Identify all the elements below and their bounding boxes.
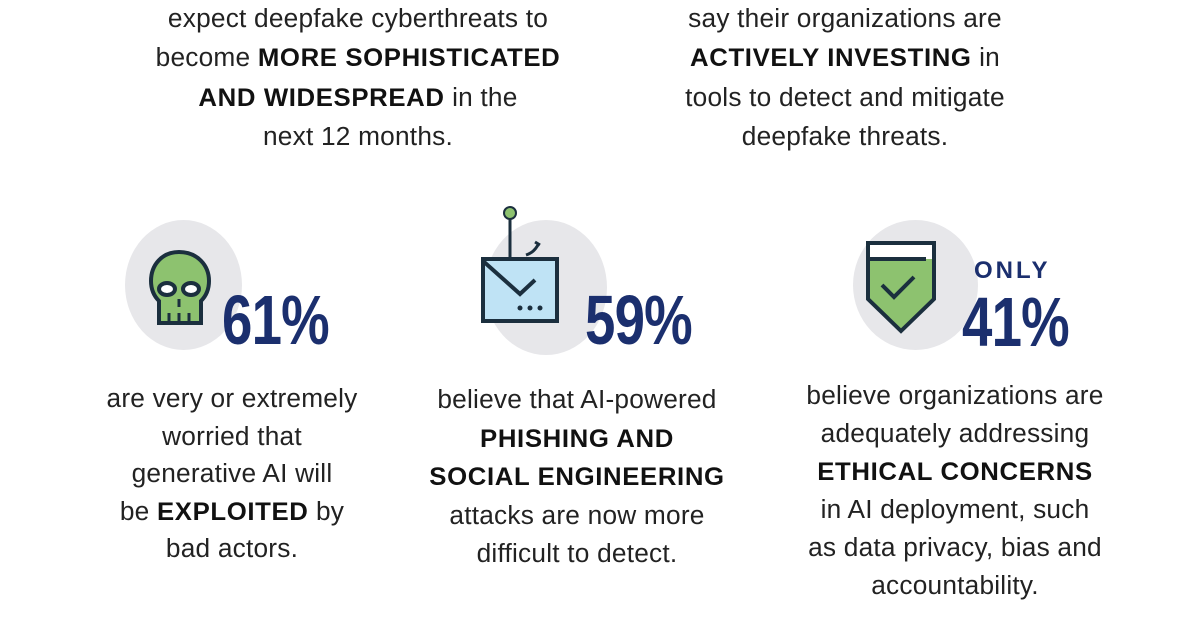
text block: top left stat: become MORE SOPHISTICATED: [156, 44, 560, 72]
icon background circle: [485, 220, 607, 355]
text block: top left stat: [156, 5, 560, 151]
text block: 59% description: attacks are now more: [449, 502, 705, 530]
text block: 41% description: [806, 382, 1104, 600]
text block: 41% description: adequately addressing: [821, 420, 1089, 448]
text block: 61% description: [107, 385, 358, 563]
text block: 41% description: believe organizations are: [806, 382, 1104, 410]
text block: top left stat: AND WIDESPREAD in the: [198, 84, 518, 112]
text block: top right stat: deepfake threats.: [742, 123, 948, 151]
text block: 61% description: be EXPLOITED by: [120, 498, 344, 526]
text block: 61% description: bad actors.: [166, 535, 298, 563]
text block: 59% description: believe that AI-powered: [437, 386, 717, 414]
label: ONLY: ONLY: [974, 257, 1050, 284]
text block: 41% description: ETHICAL CONCERNS: [817, 458, 1093, 486]
text block: top right stat: ACTIVELY INVESTING in: [690, 44, 1000, 72]
text block: 61% description: worried that: [162, 422, 302, 450]
text block: 41% description: in AI deployment, such: [821, 496, 1089, 524]
number: 61%: 61%: [222, 281, 329, 359]
text block: top right stat: say their organizations are: [688, 5, 1002, 33]
text block: 61% description: are very or extremely: [107, 385, 357, 413]
icon background circle: [125, 220, 242, 350]
text block: 59% description: PHISHING AND: [480, 424, 674, 452]
text block: top left stat: expect deepfake cyberthreats to: [168, 5, 548, 33]
text block: top right stat: [685, 5, 1005, 151]
text block: top right stat: tools to detect and mitigate: [685, 84, 1005, 112]
text block: top left stat: next 12 months.: [263, 123, 453, 151]
number: 59%: 59%: [585, 281, 692, 359]
icon background circle: [853, 220, 978, 350]
number: 41%: 41%: [962, 283, 1069, 361]
icon: skull: [149, 250, 211, 325]
panel: 59% stat: [481, 206, 692, 359]
text block: 59% description: [429, 386, 725, 568]
icon: phishing envelope: [481, 206, 559, 323]
text block: 59% description: difficult to detect.: [477, 540, 677, 568]
text block: 41% description: as data privacy, bias and: [808, 534, 1102, 562]
text block: 41% description: accountability.: [871, 572, 1039, 600]
panel: 61% stat: [125, 220, 329, 359]
icon: shield check: [866, 241, 936, 334]
panel: 41% stat: [853, 220, 1069, 361]
text block: 59% description: SOCIAL ENGINEERING: [429, 463, 725, 491]
text block: 61% description: generative AI will: [132, 460, 332, 488]
